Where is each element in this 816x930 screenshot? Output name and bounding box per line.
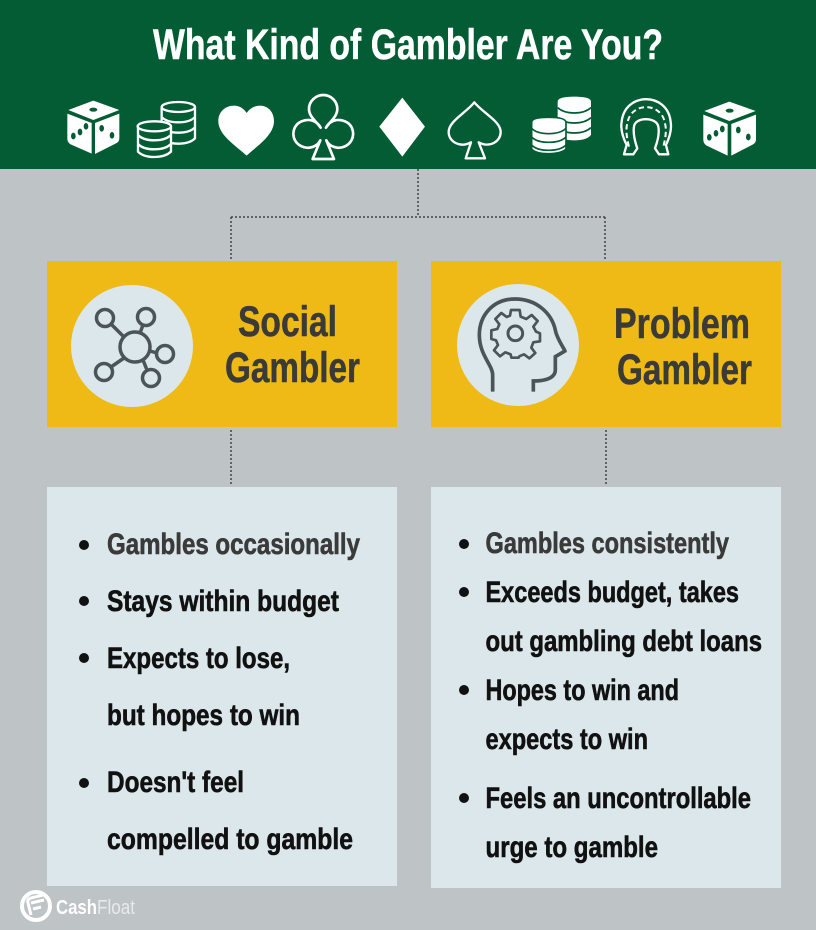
list text: Gambles occasionally xyxy=(107,528,360,561)
heading: social gambler: Gambler xyxy=(225,344,360,392)
panel: problem gambler traits xyxy=(431,487,781,888)
icon: head with gear in circle xyxy=(457,284,579,406)
icon: network in circle xyxy=(71,285,193,407)
icon: horseshoe xyxy=(621,99,671,154)
list text: compelled to gamble xyxy=(107,823,353,856)
list text xyxy=(486,527,762,864)
icon: diamond xyxy=(379,98,425,157)
heading: social gambler xyxy=(225,298,360,392)
panel: social gambler heading xyxy=(47,261,397,427)
dotted connectors xyxy=(231,169,606,485)
bullets xyxy=(459,539,469,803)
list text: urge to gamble xyxy=(486,831,658,864)
list text: Exceeds budget, takes xyxy=(486,576,739,609)
icon: outlined coin stacks xyxy=(138,102,195,158)
icon: die left xyxy=(67,101,119,154)
list text xyxy=(107,528,360,856)
list text: expects to win xyxy=(486,723,648,756)
list text: Hopes to win and xyxy=(486,674,679,707)
list text: but hopes to win xyxy=(107,699,300,732)
heading: problem gambler: Gambler xyxy=(617,346,752,394)
logo: CashFloat xyxy=(22,892,135,920)
list text: Gambles consistently xyxy=(486,527,729,560)
list text: Expects to lose, xyxy=(107,642,290,675)
icon: club xyxy=(293,95,353,159)
heading: problem gambler xyxy=(614,300,752,394)
panel: problem gambler heading xyxy=(431,261,781,427)
heading: social gambler: Social xyxy=(238,298,337,346)
icon: die right xyxy=(703,102,756,156)
list text: Doesn't feel xyxy=(107,766,244,799)
list text: Feels an uncontrollable xyxy=(486,782,751,815)
icon: solid coin stacks xyxy=(532,97,591,154)
logo: CashFloat: Float xyxy=(97,897,135,919)
panel: social gambler traits xyxy=(47,487,397,886)
header band xyxy=(0,0,816,169)
heading: problem gambler: Problem xyxy=(614,300,750,348)
logo: CashFloat: Cash xyxy=(56,897,97,919)
list text: Stays within budget xyxy=(107,585,339,618)
bullets xyxy=(79,540,89,788)
icon: heart xyxy=(218,106,274,156)
icon row: casino symbols xyxy=(67,95,756,159)
icon: spade xyxy=(449,102,501,158)
title: What Kind of Gambler Are You? xyxy=(153,21,663,69)
